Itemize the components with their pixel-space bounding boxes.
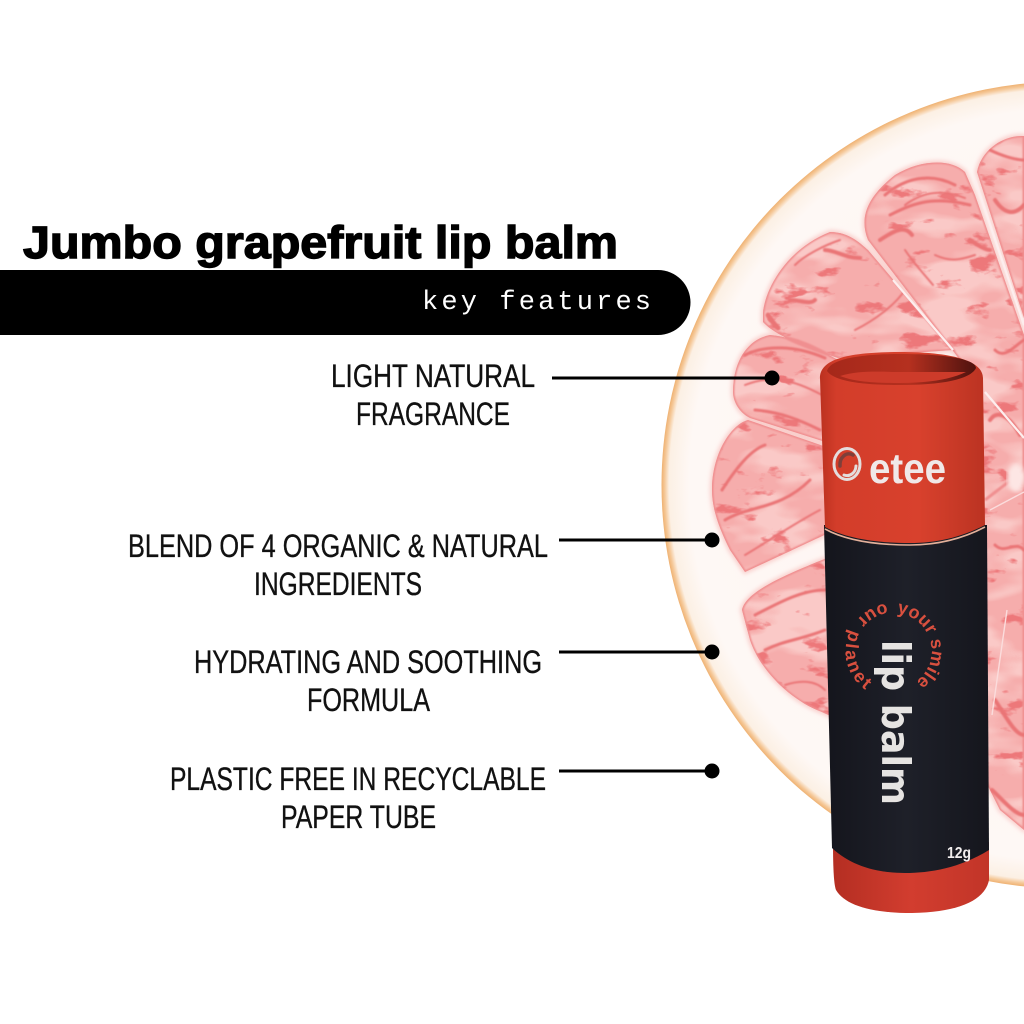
circular slogan bbox=[845, 604, 942, 690]
pointer line bbox=[552, 370, 780, 386]
banner: key features bbox=[0, 270, 690, 335]
feature text: INGREDIENTS bbox=[254, 566, 422, 602]
cap seam bbox=[825, 527, 985, 545]
cap opening bbox=[827, 354, 976, 385]
title: Jumbo grapefruit lip balm bbox=[23, 217, 618, 268]
slogan: your smile: your smile bbox=[897, 604, 942, 687]
feature text: BLEND OF 4 ORGANIC & NATURAL bbox=[128, 528, 548, 564]
tube body bbox=[824, 525, 989, 873]
pulp segments bbox=[700, 120, 1024, 840]
feature text: PLASTIC FREE IN RECYCLABLE bbox=[170, 761, 546, 797]
grapefruit slice bbox=[662, 82, 1024, 888]
logo: etee bbox=[834, 445, 946, 493]
logo swirl bbox=[834, 448, 860, 480]
pulp rim bbox=[712, 136, 1024, 830]
feature text: HYDRATING AND SOOTHING bbox=[194, 644, 542, 680]
weight: 12g bbox=[947, 845, 971, 862]
pointer line bbox=[559, 644, 720, 660]
pulp veins bbox=[722, 150, 1024, 815]
feature text: PAPER TUBE bbox=[281, 799, 436, 835]
banner bar bbox=[0, 270, 690, 335]
feature: organic blend bbox=[128, 528, 720, 602]
lip balm tube bbox=[820, 352, 989, 913]
pulp glow bbox=[712, 136, 1024, 830]
feature text: LIGHT NATURAL bbox=[331, 358, 535, 394]
feature: hydrating formula bbox=[194, 644, 720, 718]
product name: lip balm bbox=[872, 640, 917, 805]
rind bbox=[662, 82, 1024, 888]
feature: plastic free tube bbox=[170, 761, 720, 835]
segment membranes bbox=[893, 180, 1024, 438]
logo wordmark: etee bbox=[869, 445, 946, 493]
tube cap bbox=[820, 352, 985, 543]
banner label: key features bbox=[422, 288, 651, 318]
feature text: FORMULA bbox=[307, 682, 431, 718]
tube base bbox=[833, 842, 989, 913]
slogan: our planet: our planet bbox=[845, 604, 887, 690]
pith blob bbox=[1007, 464, 1024, 492]
feature: light natural fragrance bbox=[331, 358, 780, 432]
feature text: FRAGRANCE bbox=[356, 396, 510, 432]
pointer line bbox=[559, 532, 720, 548]
pointer line bbox=[559, 764, 720, 778]
